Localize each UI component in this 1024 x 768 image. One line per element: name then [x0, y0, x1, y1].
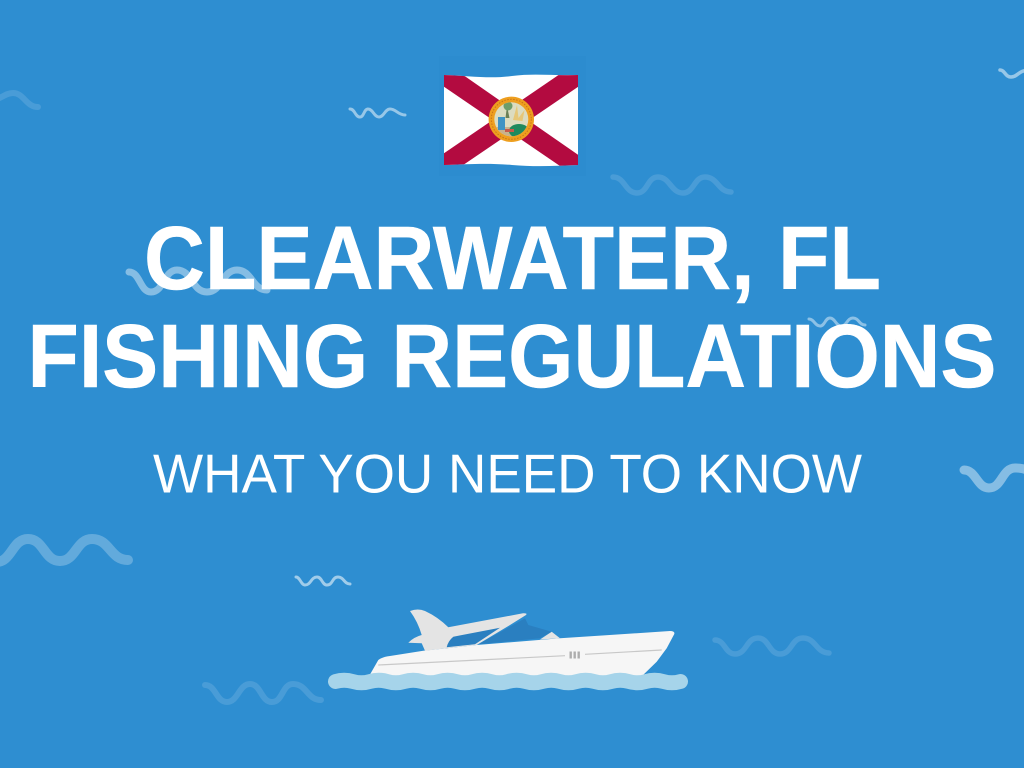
wave: behind title right	[809, 318, 865, 326]
front window	[478, 618, 552, 644]
wave: right edge	[964, 468, 1024, 488]
wave: small top left	[350, 109, 405, 117]
icon: Florida flag	[444, 74, 578, 166]
icon: state seal	[489, 97, 534, 142]
side window	[447, 628, 500, 647]
water band under boat	[336, 680, 680, 683]
wave: top left	[0, 93, 38, 107]
flybridge arch	[408, 610, 527, 651]
wave: small bottom left	[296, 577, 350, 585]
wave: top right	[1000, 70, 1024, 77]
title	[28, 209, 996, 407]
hull vents	[570, 652, 580, 658]
title line 1: CLEARWATER, FL	[144, 209, 881, 309]
wave: bottom right	[715, 638, 829, 654]
icon: motor yacht	[368, 610, 674, 678]
subtitle: WHAT YOU NEED TO KNOW	[153, 444, 862, 505]
hull	[368, 631, 674, 678]
rear cabin panel	[540, 632, 560, 640]
title line 2: FISHING REGULATIONS	[28, 306, 996, 407]
wave: bottom near hull left	[205, 684, 321, 702]
wave: bottom left large	[0, 539, 128, 562]
hull stripe	[378, 650, 662, 665]
wave: behind title left	[129, 270, 267, 292]
wave: below flag	[613, 177, 731, 193]
